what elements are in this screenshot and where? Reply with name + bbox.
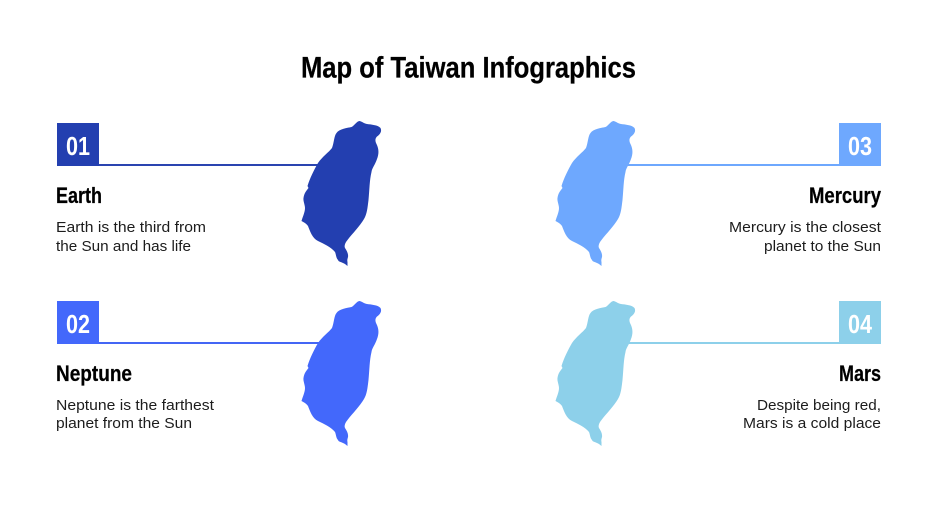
panel: 01 Earth — [56, 121, 381, 266]
heading: Mercury: Mercury — [809, 183, 882, 208]
text: Mercury description: Mercury is the closest — [729, 219, 882, 236]
number badge 04: 04 — [848, 309, 872, 339]
number badge 01: 01 — [66, 131, 90, 161]
panel: 04 Mars — [556, 301, 881, 446]
heading: Mars: Mars — [839, 361, 881, 386]
connector line 04 — [625, 342, 840, 344]
heading: Earth: Earth — [56, 183, 102, 208]
number badge 03 — [839, 123, 881, 166]
text: Earth description: the Sun and has life — [56, 238, 191, 255]
map of Taiwan: Mercury — [556, 121, 635, 266]
number badge 01 — [57, 123, 99, 166]
map of Taiwan: Neptune — [302, 301, 381, 446]
panel: 02 Neptune — [56, 301, 381, 446]
text: Mars description: Despite being red, — [757, 397, 881, 414]
map of Taiwan: Earth — [302, 121, 381, 266]
connector line 02 — [99, 342, 324, 344]
heading: Neptune: Neptune — [56, 361, 132, 386]
number badge 02: 02 — [66, 309, 90, 339]
number badge 04 — [839, 301, 881, 344]
number badge 02 — [57, 301, 99, 344]
text: Earth description: Earth is the third from — [56, 219, 206, 236]
text: Neptune description: Neptune is the farthest — [56, 397, 215, 414]
map of Taiwan: Mars — [556, 301, 635, 446]
title: Map of Taiwan Infographics — [301, 52, 636, 84]
number badge 03: 03 — [848, 131, 872, 161]
text: Mercury description: planet to the Sun — [764, 238, 881, 255]
text: Neptune description: planet from the Sun — [56, 415, 192, 432]
connector line 03 — [625, 164, 840, 166]
text: Mars description: Mars is a cold place — [743, 415, 881, 432]
connector line 01 — [99, 164, 324, 166]
panel: 03 Mercury — [556, 121, 882, 266]
